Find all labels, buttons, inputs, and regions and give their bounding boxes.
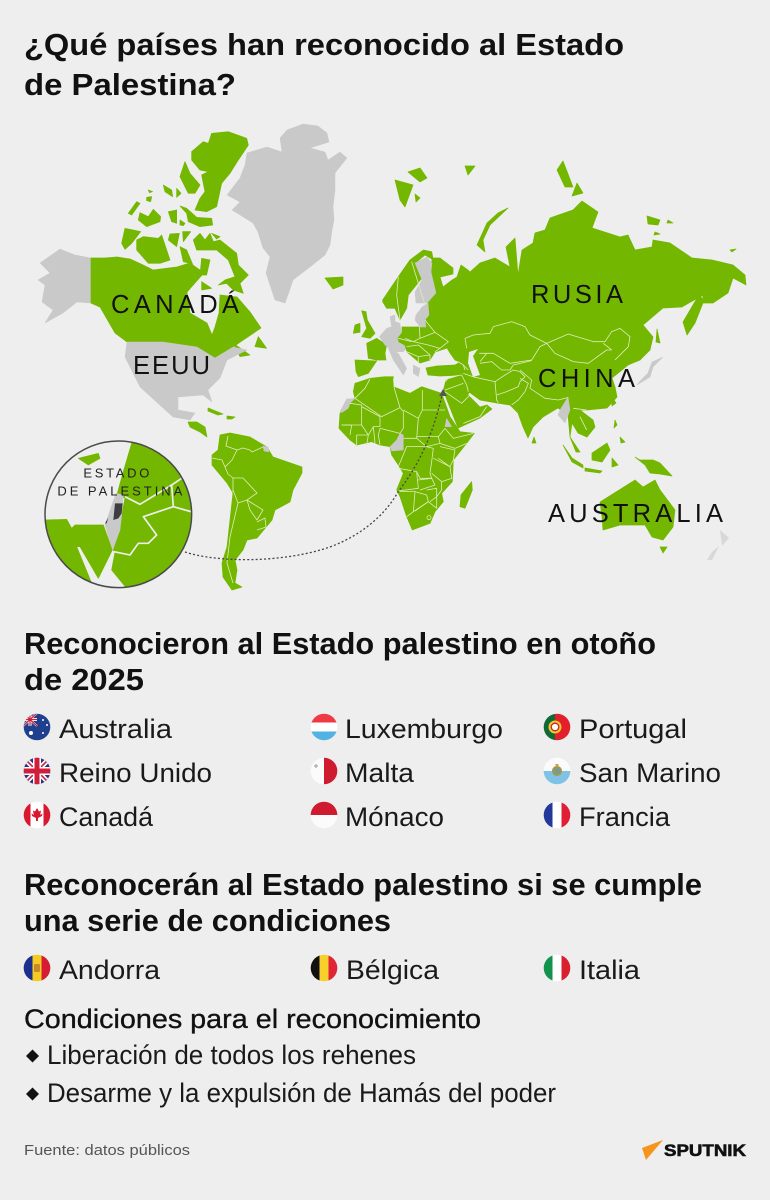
western sahara (340, 398, 355, 413)
kamchatka, sakhalin (656, 293, 703, 343)
world map (38, 124, 746, 590)
france (367, 338, 387, 360)
south america borders (212, 436, 266, 583)
flag: italia (544, 955, 570, 981)
inset label (57, 465, 183, 498)
dotted connector line (185, 395, 442, 560)
country label: russia: RUSIA (531, 281, 623, 309)
asia borders (445, 322, 630, 430)
bullet (26, 1050, 39, 1062)
iceland (325, 277, 343, 289)
greenland (227, 124, 347, 303)
country label: canada: CANADÁ (111, 290, 239, 319)
inset: israel (105, 493, 123, 550)
flag: monaco (310, 801, 338, 829)
flag: canada (24, 802, 50, 828)
greece (413, 365, 420, 377)
united states and mexico (125, 342, 247, 420)
inset map: estado de palestina (44, 440, 192, 588)
arctic russian islands (395, 161, 736, 252)
flag: australia (23, 713, 51, 741)
flag: belgica (310, 954, 338, 982)
heading: reconocieron: de 2025 (24, 662, 144, 697)
country label: australia: AUSTRALIA (548, 500, 723, 528)
french guiana (263, 446, 269, 452)
label: reino unido: Reino Unido (59, 758, 212, 788)
inset: cyprus (78, 453, 100, 465)
heading: reconocieron: Reconocieron al Estado palestino en otoño (24, 626, 656, 661)
heading: reconoceran: Reconocerán al Estado palestino si se cumple (24, 867, 702, 902)
label: andorra: Andorra (59, 955, 161, 985)
conditions subheading: Condiciones para el reconocimiento (24, 1004, 481, 1034)
palestine marker (439, 389, 447, 396)
label: malta: Malta (345, 758, 415, 788)
label: portugal: Portugal (579, 714, 687, 744)
inset label: ESTADO (83, 465, 149, 480)
italy (388, 348, 407, 375)
flag: andorra (23, 954, 51, 982)
africa borders (342, 378, 473, 520)
flag: portugal (543, 713, 571, 741)
ireland (353, 323, 360, 333)
heading: reconocieron (24, 626, 656, 697)
label: belgica: Bélgica (346, 955, 440, 985)
canadian arctic islands (122, 132, 267, 357)
sputnik logo: SPUTNIK (664, 1141, 747, 1160)
label: san marino: San Marino (579, 758, 721, 788)
australia (600, 480, 675, 540)
heading: reconoceran: una serie de condiciones (24, 903, 391, 938)
flag: malta (310, 757, 338, 785)
title: ¿Qué países han reconocido al Estado (24, 27, 624, 62)
inset: middle east land (111, 443, 191, 587)
flag: luxemburgo (310, 713, 338, 741)
condition 1: Liberación de todos los rehenes (47, 1040, 416, 1070)
title: de Palestina? (24, 67, 236, 102)
germany and neighbours (379, 315, 410, 352)
country label: china: CHINA (538, 365, 635, 393)
south east asia and oceania islands (532, 395, 672, 553)
heading: reconoceran (24, 867, 702, 938)
source: Fuente: datos públicos (24, 1142, 190, 1159)
inset label: DE PALESTINA (57, 483, 183, 498)
flag: reino unido (23, 757, 51, 785)
madagascar (460, 482, 472, 508)
central america and caribbean (188, 408, 235, 437)
inset: egypt and sinai (46, 519, 113, 582)
label: francia: Francia (579, 802, 671, 832)
new zealand (707, 530, 729, 560)
iberia (355, 360, 377, 377)
japan (637, 357, 663, 385)
country label: usa: EEUU (133, 352, 210, 380)
caspian sea (468, 349, 480, 377)
condition 2: Desarme y la expulsión de Hamás del poder (47, 1078, 556, 1108)
label: canada: Canadá (59, 802, 154, 832)
label: italia: Italia (579, 955, 641, 985)
alaska (38, 249, 91, 323)
cameroon (390, 433, 403, 451)
myanmar (558, 397, 570, 423)
title (24, 27, 624, 102)
inset: west bank and gaza (105, 503, 123, 523)
eritrea (445, 418, 452, 427)
europe west (353, 250, 433, 377)
eastern europe borders (397, 262, 468, 370)
eurasia (398, 201, 746, 438)
flag: san marino (543, 757, 571, 785)
baltic states (415, 303, 429, 327)
inset: borders (114, 478, 191, 556)
label: luxemburgo: Luxemburgo (345, 714, 503, 744)
flag: francia (544, 802, 570, 828)
south america (212, 433, 302, 590)
uk (362, 311, 375, 338)
bullet (26, 1088, 39, 1100)
sputnik logo (642, 1140, 747, 1160)
finland (415, 257, 436, 303)
scandinavia (383, 250, 433, 320)
africa (339, 377, 474, 530)
label: australia: Australia (59, 714, 173, 744)
canada mainland (91, 257, 261, 358)
label: monaco: Mónaco (345, 802, 444, 832)
